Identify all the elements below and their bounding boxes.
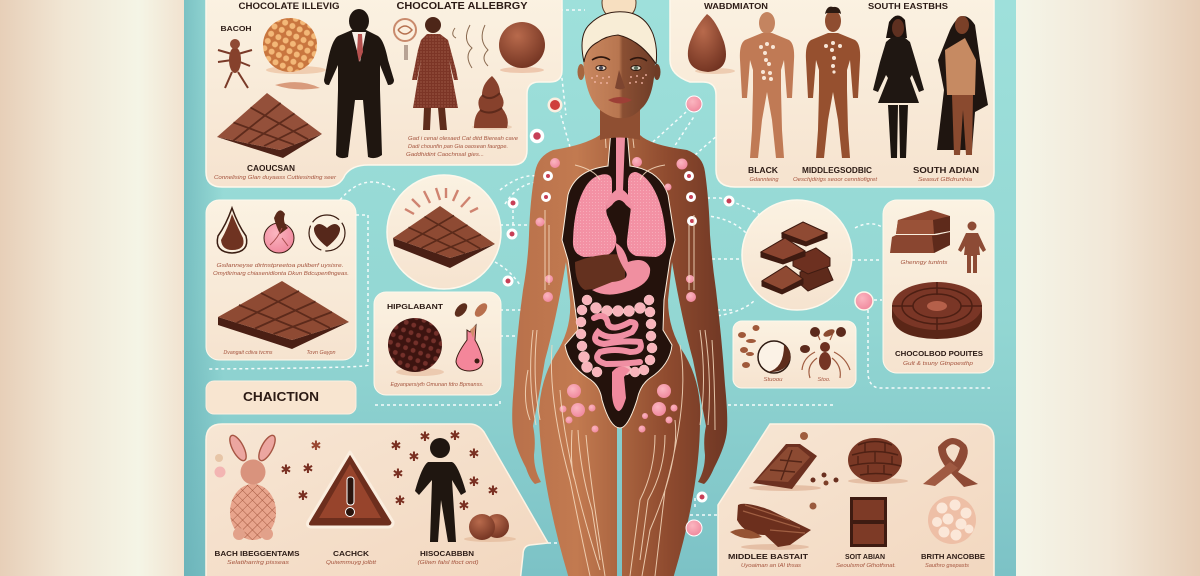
caption: symptoms text: [213, 263, 349, 277]
teal central background: [184, 0, 1016, 576]
icon: allergen specks: ✱: [298, 488, 309, 503]
icon: dark beans: [800, 327, 846, 353]
head: [578, 0, 660, 140]
icon: chocolate ball: [499, 22, 545, 73]
label: south asian: SOUTH ADIAN: [913, 166, 979, 175]
caption: person: (Gliwn falsl tfoct ond): [418, 560, 479, 566]
caption: british: Sauthro gsepasts: [925, 563, 970, 569]
dashed connector lines: [208, 10, 990, 543]
rash spots: [536, 157, 696, 432]
icon: person with allergens: [415, 438, 466, 542]
figure: darker man with rash: [806, 7, 860, 158]
panel: chocolate points: [883, 200, 994, 373]
label: bacon: BACOH: [220, 24, 252, 33]
label: cachck: CACHCK: [333, 549, 370, 558]
callout nodes: pink and red markers: [504, 96, 733, 536]
icon: person symbol: [958, 222, 986, 273]
label: british: BRITH ANCOBBE: [921, 552, 985, 561]
heading: chocolate allergy: CHOCOLATE ALLEBRGY: [396, 1, 528, 12]
icon: chocolate balls: [464, 514, 516, 542]
icon: allergen specks: ✱: [311, 438, 322, 453]
figure: woman in black dress: [873, 15, 924, 158]
white ringed spots: [542, 172, 696, 224]
label: middle eastern: MIDDLEE BASTAIT: [728, 552, 808, 561]
icon: allergen specks: ✱: [420, 429, 431, 444]
icon: chocolate bar: [217, 93, 322, 158]
panel: chocolate allergy top left: [206, 0, 562, 187]
figure: woman in dress: [412, 17, 458, 130]
label: middle eastern: MIDDLEGSODBIC: [802, 166, 872, 175]
liver: [575, 254, 625, 290]
caption: south asian: Seoulsmof Gthotfsnat.: [836, 563, 896, 569]
icon: chocolate swirl: [472, 76, 512, 130]
icon: allergen specks: ✱: [469, 474, 480, 489]
heading: chaiction: CHAICTION: [243, 389, 319, 404]
small intestine: [594, 316, 641, 364]
caption: black: Gdannteing: [750, 177, 779, 183]
icon: broken chocolate bar: [749, 432, 838, 491]
caption: chocolate allergy text: Gad i cenai olesaed Cat ditd Biereah cave: [408, 136, 518, 142]
skin lines: [525, 130, 715, 576]
icon: stacked blocks: [890, 210, 950, 253]
icon: allergen specks: [281, 428, 499, 513]
icon: heart circle: [309, 215, 345, 251]
icon: small nuts: [738, 325, 760, 368]
panel: chaiction heading: [206, 381, 356, 414]
caption: chocolate allergy text: Gaddhidint Caochnsal gies...: [406, 152, 484, 158]
large intestine: [576, 295, 657, 377]
icon: allergen specks: ✱: [488, 483, 499, 498]
caption: coconut: Stuoou: [764, 377, 783, 383]
circle: chocolate bar with rays: [387, 175, 501, 289]
icon: chocolate bar lower: [730, 502, 816, 550]
icon: large chocolate bar: [218, 281, 349, 349]
icon: warning triangle: [308, 452, 393, 527]
icon: ant figure: [218, 39, 252, 88]
icon: chocolate bunny: [227, 433, 278, 540]
icon: allergen specks: ✱: [391, 438, 402, 453]
icon: allergen specks: ✱: [395, 493, 406, 508]
label: south asian: SOIT ABIAN: [845, 552, 885, 561]
icon: berry cluster: [388, 318, 444, 376]
icon: allergen specks: ✱: [469, 446, 480, 461]
caption: chocolate points: Gult & tsuny Gtnpoesthp: [903, 361, 973, 367]
left background strip: [0, 0, 185, 576]
stomach: [592, 243, 650, 295]
icon: chocolate bar: [393, 206, 495, 268]
figure: man with rash: [740, 12, 794, 158]
caption: warning: Quiwmmuyg jolbtt: [326, 560, 377, 566]
heading: chocolate illevig: CHOCOLATE ILLEVIG: [238, 1, 340, 12]
icon: squiggles: [453, 25, 488, 68]
caption: chocolate allergy text: [406, 136, 518, 158]
heading: wabdmiaton: WABDMIATON: [704, 2, 768, 11]
trachea: [606, 133, 632, 210]
caption: bar right: Tovn Gaypn: [306, 350, 336, 356]
icon: rays: [405, 188, 478, 214]
caption: blocks: Ghenngy tuntnts: [900, 260, 948, 266]
label: caucasian: CAOUCSAN: [247, 164, 295, 173]
panel: small nuts and ant: [733, 321, 856, 388]
figure: man in black suit: [324, 9, 394, 158]
icon: stacked chocolate: [761, 222, 833, 294]
torso cavity: [562, 130, 675, 428]
label: bach ibeggentams: BACH IBEGGENTAMS: [214, 549, 300, 558]
icon: decorative blobs: [214, 454, 226, 478]
icon: organ bulb: [264, 210, 294, 253]
icon: allergen specks: ✱: [409, 449, 420, 464]
icon: honeycomb nut ball: [263, 18, 326, 89]
heading: chocolate points: CHOCOLBOD POUITES: [895, 349, 983, 358]
circle: chocolate pieces: [742, 200, 852, 310]
icon: chocolate teardrop: [688, 14, 735, 74]
icon: nuts: [452, 301, 490, 319]
icon: ring: [394, 19, 416, 60]
panel: hipglabant: [374, 292, 501, 395]
icon: chocolate disc: [892, 282, 982, 339]
heading: south eastbhs: SOUTH EASTBHS: [868, 2, 949, 11]
body silhouette: [512, 108, 727, 576]
caption: symptoms text: Gsilanneyse dirtnstpreetoa puliberf uysisre.: [216, 263, 344, 269]
caption: bunny: Selatiharrirg pisseas: [227, 560, 290, 566]
panel: left middle symptoms: [206, 200, 356, 360]
panel: top right population figures: [670, 0, 994, 187]
panel: bottom left triggers: [206, 424, 548, 576]
caption: chocolate allergy text: Dadi chounfin pan Gia oaosean faurgpe.: [408, 144, 508, 150]
icon: awareness ribbon: [923, 438, 978, 487]
icon: allergen specks: ✱: [303, 461, 314, 476]
icon: allergen specks: ✱: [459, 498, 470, 513]
caption: south asian: Seasut GBdrunhia: [918, 177, 972, 183]
icon: allergen specks: ✱: [393, 466, 404, 481]
icon: chocolate cluster: [848, 438, 908, 484]
icon: coconut: [758, 341, 790, 373]
label: hisocabbbn: HISOCABBBN: [420, 549, 474, 558]
icon: square chocolate: [850, 497, 887, 547]
caption: bar left: Dvangait cdiva tvcms: [224, 350, 273, 356]
icon: pale nut cluster: [928, 496, 976, 544]
icon: pink flask: [456, 325, 483, 371]
label: black: BLACK: [748, 166, 778, 175]
icon: ant: [802, 333, 850, 378]
icon: allergen specks: ✱: [450, 428, 461, 443]
teal left shading: [184, 0, 224, 576]
caption: caucasian: Connelising Glan duyaass Cuttiesinding seer: [214, 175, 336, 181]
caption: hipglabant: Egyanpersiyth Omunan fdro Bpmanss.: [390, 382, 484, 388]
panel: bottom right foods: [718, 424, 994, 576]
figure: central woman anatomy: [512, 0, 727, 576]
right background strip: [1015, 0, 1200, 576]
lungs: [573, 174, 616, 257]
node: pink dot: [855, 292, 873, 310]
heading: hipglabant: HIPGLABANT: [387, 302, 443, 311]
figure: woman with cloak: [937, 16, 988, 155]
caption: middle eastern: Uyoaiman an IAI thsas: [741, 563, 802, 569]
rectum: [612, 366, 630, 411]
caption: ant: Stoo.: [818, 377, 830, 383]
icon: drop: [217, 208, 247, 253]
caption: symptoms text: Omytlirinarg chiasenidlonta Dkun Bdcupenfingeas.: [213, 271, 349, 277]
caption: middle eastern: Oeschjdirigs seoor cenntiofigret: [793, 177, 878, 183]
icon: allergen specks: ✱: [281, 462, 292, 477]
